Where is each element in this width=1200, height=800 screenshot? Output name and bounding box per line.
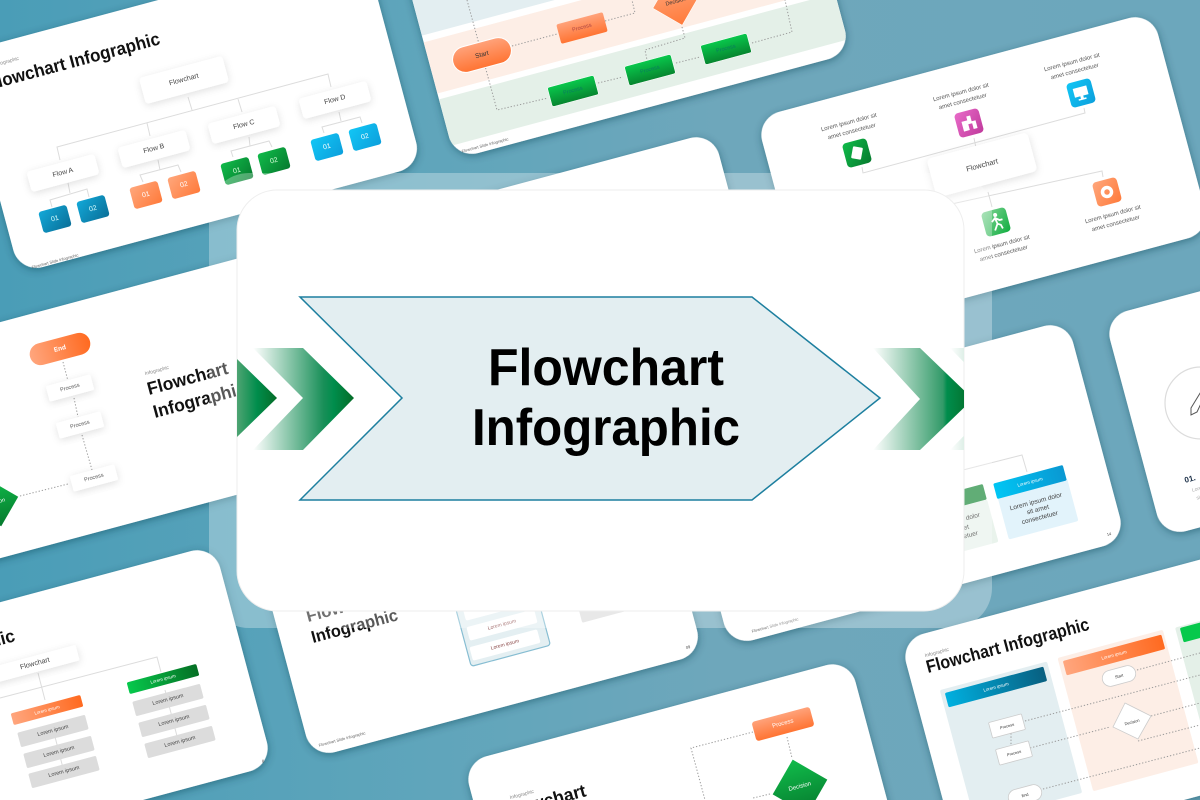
box: Process 2 (996, 741, 1032, 765)
pill: Start: Start (1114, 672, 1125, 680)
row 2 left: Lorem ipsum (43, 745, 76, 759)
label: magenta: Lorem ipsum dolor sit (933, 83, 990, 103)
pill: End (1007, 783, 1043, 800)
dotted links (20, 362, 92, 496)
header: blue: Lorem ipsum (983, 681, 1009, 693)
label: orange: Lorem ipsum dolor sit (1085, 205, 1142, 225)
green text (927, 511, 982, 546)
diamond: Decision (0, 474, 24, 532)
tag: Infographic (144, 365, 170, 377)
row 2 right (138, 705, 210, 737)
slide: swim lane columns (900, 534, 1200, 800)
slide: decision flow (463, 659, 908, 800)
box: Flow B: Flow B (143, 143, 166, 155)
row 3: Lorem ipsum (490, 638, 520, 652)
row 1: Lorem ipsum (483, 598, 513, 612)
slide: hidden behind title card (317, 132, 772, 458)
slide: vertical process (0, 251, 325, 577)
box: Process 2: Process (1006, 749, 1022, 757)
box: Process (751, 707, 815, 741)
slide: swim lanes (396, 0, 851, 159)
diamond: Decision (1113, 703, 1151, 739)
row 3 left (28, 756, 100, 788)
blue text (1009, 491, 1064, 526)
diamond: Decision (765, 752, 835, 800)
footer: Flowchart Slide Infographic (31, 252, 79, 270)
title: Flowchart Infographic (924, 614, 1091, 677)
pill: Start (450, 35, 514, 75)
box: Flowchart: Flowchart (965, 156, 1000, 174)
row 3 left: Lorem ipsum (48, 765, 81, 779)
pill: End: End (1021, 792, 1029, 798)
left chevrons (237, 348, 354, 450)
box: Process: Process (772, 718, 794, 730)
chip D02 (348, 123, 382, 151)
chip B02: 02 (179, 181, 189, 189)
green text: Lorem ipsum dolor (927, 511, 982, 532)
dotted links (691, 732, 792, 800)
header: orange: Lorem ipsum (34, 704, 60, 716)
box: Process 3: Process (84, 472, 105, 483)
green body (918, 499, 998, 561)
heading (472, 339, 740, 457)
box: Flow A (26, 154, 100, 192)
chip D01: 01 (322, 143, 332, 151)
page number: 8 (261, 758, 265, 764)
box: Flow C: Flow C (233, 119, 255, 131)
diamond: Decision: Decision (1124, 718, 1140, 726)
box: Process green 1 (547, 75, 599, 107)
chip D02: 02 (360, 133, 370, 141)
icon: green paper (842, 138, 872, 168)
connectors (0, 657, 178, 772)
pill: End (27, 330, 93, 368)
chip A02: 02 (88, 205, 98, 213)
label: sky: Lorem ipsum dolor sit (1044, 53, 1101, 73)
row 1 right (132, 684, 204, 716)
slide: panel with title (253, 433, 703, 758)
footer: Flowchart Slide Infographic (461, 136, 509, 154)
chip B01 (129, 181, 163, 209)
row 1 left: Lorem ipsum (37, 724, 70, 738)
connector (963, 455, 1027, 472)
icon: sky monitor (1066, 78, 1096, 108)
box: Flow D (298, 81, 372, 119)
box: Process 2 (56, 411, 104, 439)
box: Process green 3 (700, 33, 752, 65)
lane: green (1175, 599, 1200, 761)
row 3 right: Lorem ipsum (164, 735, 197, 749)
blue text: Lorem ipsum dolor (1009, 491, 1064, 512)
grey box: Lorem ipsum (599, 599, 629, 613)
connectors (862, 108, 1103, 207)
header: green (127, 664, 199, 694)
slide: two cards (671, 320, 1126, 646)
box: Process 3 (70, 464, 118, 492)
circle (1165, 367, 1200, 439)
chip D01 (310, 133, 344, 161)
row 2 (466, 609, 538, 641)
row 1 (462, 589, 534, 621)
page number: 09 (685, 644, 692, 650)
icon: pen (1191, 390, 1200, 415)
row 2 right: Lorem ipsum (158, 714, 191, 728)
chip B01: 01 (141, 191, 151, 199)
row 3 right (144, 726, 216, 758)
blue text: consectetuer (1021, 510, 1060, 526)
green header (913, 484, 987, 518)
box: Process 1 (46, 374, 94, 402)
grey box (578, 589, 650, 623)
chip A01: 01 (50, 215, 60, 223)
box: Flow B (117, 130, 191, 168)
tag: Infographic (924, 647, 950, 659)
pill: Start (1101, 664, 1137, 688)
footer: Flowchart Slide Infographic (751, 616, 799, 634)
chip C01 (220, 157, 254, 185)
slide: icon flow (756, 12, 1200, 338)
chip C01: 01 (232, 167, 242, 175)
chip C02: 02 (269, 157, 279, 165)
lane: orange (1057, 630, 1199, 791)
chip B02 (167, 171, 201, 199)
slide: pen circle (1104, 211, 1200, 537)
dotted links (467, 0, 792, 110)
slide: flow tree (0, 0, 422, 273)
label: green: amet consectetuer (827, 123, 877, 141)
blue header: Lorem ipsum (1017, 476, 1043, 488)
green text: consectetuer (941, 530, 980, 546)
label: lime: amet consectetuer (979, 245, 1029, 263)
row 3 (469, 629, 541, 661)
heading: Flowchart (488, 339, 724, 397)
header: orange: Lorem ipsum (1101, 649, 1127, 661)
page number: 14 (1106, 531, 1113, 537)
icon: lime runner (981, 207, 1011, 237)
pill: End: End (53, 344, 67, 354)
title arrow (300, 297, 880, 500)
blue header (993, 465, 1067, 499)
chip A01 (38, 205, 72, 233)
green text: sit amet (946, 524, 970, 536)
header: blue (945, 667, 1047, 707)
box: Process orange: Process (572, 22, 593, 33)
box: Process green 3: Process (716, 43, 737, 54)
blue body (998, 478, 1078, 540)
row 1 left (17, 715, 89, 747)
icon: orange gear (1092, 177, 1122, 207)
label: green: Lorem ipsum dolor sit (821, 113, 878, 133)
box: Flow A: Flow A (52, 167, 74, 179)
title line 1: Flowchart (304, 587, 387, 626)
box: Flowchart (0, 645, 80, 683)
icon: magenta building (954, 108, 984, 138)
row 1 right: Lorem ipsum (152, 693, 185, 707)
box: Process 1 (989, 714, 1025, 738)
row 2 left (23, 736, 95, 768)
box: Flowchart: Flowchart (19, 657, 51, 671)
label: lime: Lorem ipsum dolor sit (974, 235, 1031, 255)
header: green (1180, 602, 1200, 642)
title line 2: Infographic (151, 378, 248, 422)
slide: two columns (0, 545, 273, 800)
box: Process 1: Process (999, 722, 1015, 730)
connectors (50, 74, 362, 207)
chip C02 (257, 147, 291, 175)
row 2: Lorem ipsum (487, 618, 517, 632)
box: Flow C (207, 106, 281, 144)
diamond: Decision: Decision (788, 781, 812, 793)
lane backgrounds (396, 0, 847, 146)
box: Process green 1: Process (563, 85, 584, 96)
box: Process orange (556, 12, 608, 44)
footer: Flowchart Slide Infographic (318, 730, 366, 748)
label: sky: amet consectetuer (1050, 63, 1100, 81)
box: Flow D: Flow D (324, 94, 346, 106)
dotted links (1011, 653, 1200, 789)
heading: Infographic (472, 399, 740, 457)
box: Flowchart (139, 56, 229, 104)
chip A02 (76, 195, 110, 223)
box: Process green 2 (624, 54, 676, 86)
label: magenta: amet consectetuer (938, 93, 988, 111)
right chevrons (876, 348, 964, 450)
blue text: sit amet (1026, 504, 1050, 516)
title line 2: Infographic (309, 605, 400, 647)
number: 01. (1183, 473, 1197, 485)
header: orange (1063, 635, 1165, 675)
box: Process 1: Process (60, 382, 81, 393)
title line 1: Flowchart (145, 358, 230, 399)
box: Process green 2: Process (640, 64, 661, 75)
box: Process 2: Process (70, 419, 91, 430)
lane: blue (940, 661, 1082, 800)
main title card (236, 190, 964, 612)
translucent halo (209, 173, 992, 628)
box: Flowchart (927, 132, 1037, 198)
outlined panel (438, 520, 550, 666)
pill: Start: Start (474, 50, 490, 60)
box: Flowchart: Flowchart (168, 73, 200, 87)
label: orange: amet consectetuer (1091, 215, 1141, 233)
diamond: Decision (647, 0, 705, 31)
header: green: Lorem ipsum (150, 673, 176, 685)
header: orange (11, 695, 83, 725)
